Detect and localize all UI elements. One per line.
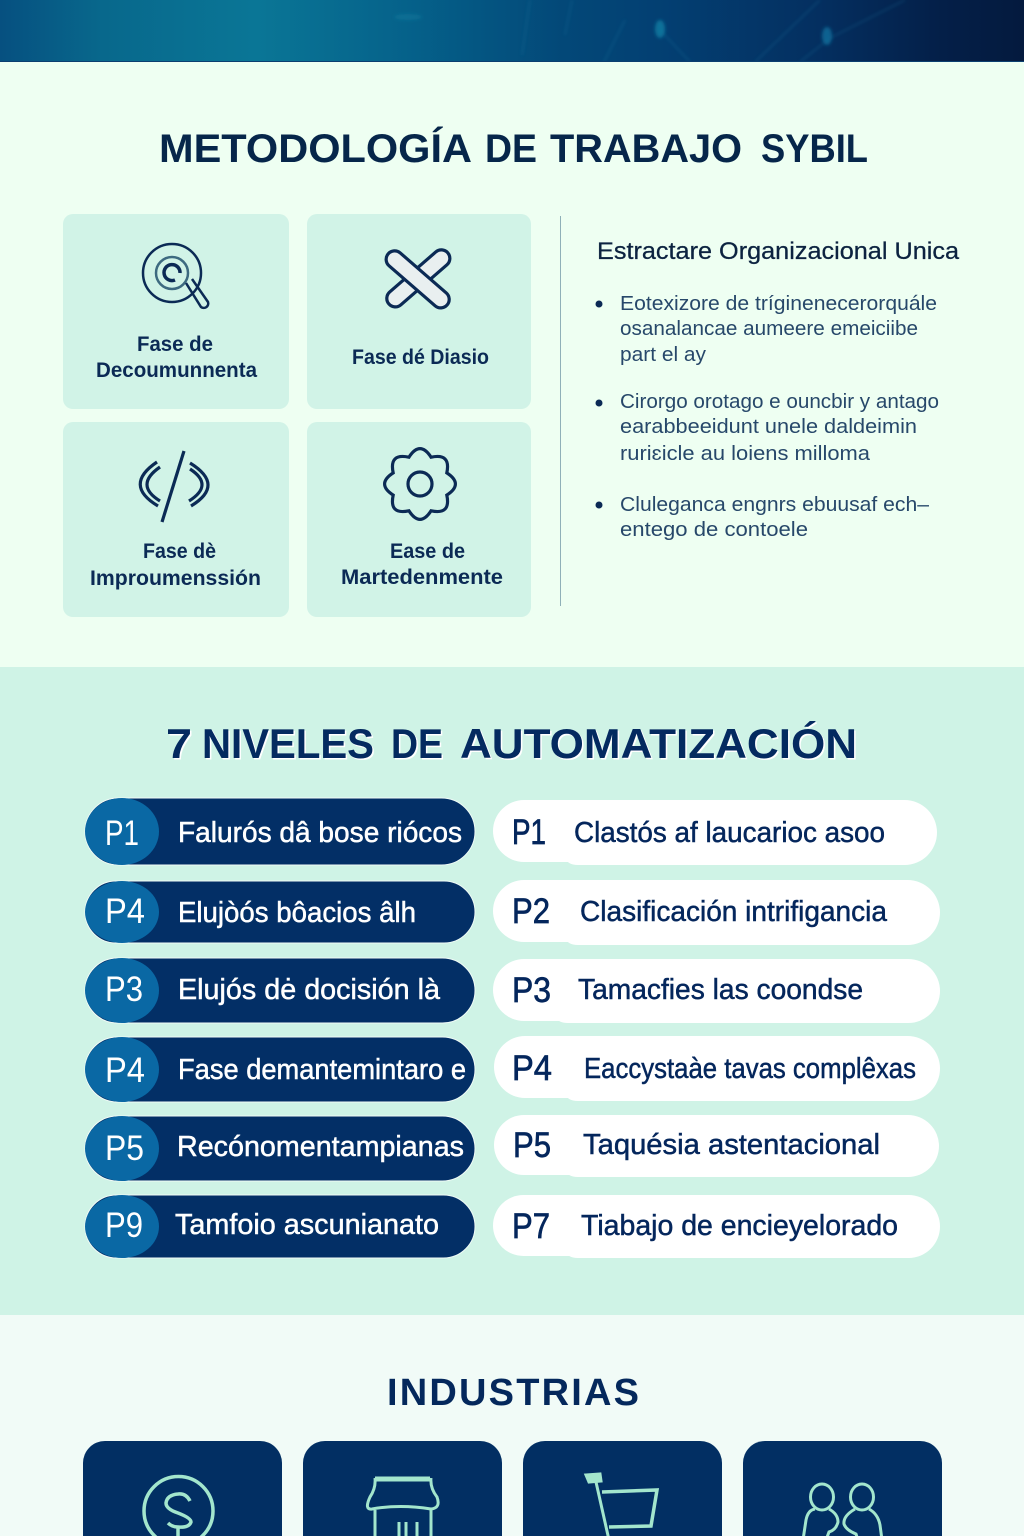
card: fase de diasio xyxy=(307,214,531,409)
level row: P7: Tiabajo de encieyelorado xyxy=(581,1210,898,1242)
label: fase de diasio: Fase dé Diasio xyxy=(352,346,489,369)
title: niveles: DE xyxy=(391,720,443,767)
icon: people xyxy=(803,1484,882,1536)
level row: P9: P9 xyxy=(105,1206,143,1245)
level row: P3 xyxy=(85,958,475,1023)
level row: P4 fase: P4 xyxy=(105,1051,145,1090)
icon: dollar coin xyxy=(144,1476,213,1536)
level row: P4: Elujòós bôacios âlh xyxy=(178,897,416,929)
level row: P5 taquésia: Taquésia astentacional xyxy=(583,1129,880,1161)
level row: P7 xyxy=(493,1195,940,1258)
level row: P7: P7 xyxy=(512,1207,550,1246)
level row: P3 tamacfies xyxy=(493,959,940,1023)
bullet item 2 xyxy=(596,391,939,465)
title: niveles: 7 xyxy=(168,722,194,768)
title: metodología: DE xyxy=(485,127,537,171)
label: fase de improumenssión: Fase dè xyxy=(143,540,216,563)
bullet item 1: Eotexizore de tríginenecerorquále xyxy=(620,293,937,315)
title: metodología: SYBIL xyxy=(761,127,868,171)
title: niveles: NIVELES xyxy=(202,720,374,767)
bullet item 3 xyxy=(596,494,930,541)
level row: P3: Elujós dė docisión là xyxy=(178,974,441,1006)
level row: P5 taquésia: P5 xyxy=(513,1126,551,1165)
bullet item 3: Cluleganca engnrs ebuusaf ech– xyxy=(620,494,930,516)
level row: P4: P4 xyxy=(105,892,145,931)
level row: P2: Clasificación intrifigancia xyxy=(580,896,888,928)
title: niveles: 7 xyxy=(166,720,192,767)
level row: P5: P5 xyxy=(105,1129,144,1168)
level row: P5: Recónomentampianas xyxy=(177,1131,464,1163)
level row: P9 xyxy=(85,1195,475,1258)
level row: P4 eaccystaàe: P4 xyxy=(512,1049,552,1088)
title: metodología: METODOLOGÍA xyxy=(159,126,472,171)
bullet item 2: earabbeeidunt unele daldeimin xyxy=(620,416,917,438)
card: people xyxy=(743,1441,942,1536)
level row: P1: P1 xyxy=(105,814,139,853)
level row: P1 xyxy=(85,798,475,865)
icon: magnifier xyxy=(143,244,208,308)
icon: shopping cart xyxy=(586,1474,657,1536)
level row: P1: Falurós dâ bose riócos xyxy=(178,817,462,849)
bullet item 1: part el ay xyxy=(620,344,706,366)
icon: store xyxy=(367,1478,438,1536)
bullet item 1: osanalancae aumeere emeiciibe xyxy=(620,318,918,340)
title: niveles: NIVELES xyxy=(204,722,376,768)
bullet list xyxy=(596,293,939,541)
white levels column xyxy=(493,800,940,1258)
title: niveles xyxy=(166,719,858,768)
icon: gear xyxy=(385,449,455,519)
title: niveles: AUTOMATIZACIÓN xyxy=(462,720,858,768)
title: industrias: INDUSTRIAS xyxy=(387,1372,639,1414)
section: niveles de automatización xyxy=(0,667,1024,1315)
card: finance xyxy=(83,1441,282,1536)
dark levels column xyxy=(85,798,475,1258)
section: metodología xyxy=(0,62,1024,667)
card: ease de martedenmente xyxy=(307,422,531,617)
title: niveles: AUTOMATIZACIÓN xyxy=(460,719,857,767)
label: fase de decoumunnenta: Fase de xyxy=(137,333,213,356)
card: fase de decoumunnenta xyxy=(63,214,289,409)
heading: estructura organizacional: Estractare Organizacional Unica xyxy=(597,238,960,265)
card: shopping xyxy=(523,1441,722,1536)
level row: P5 taquésia xyxy=(494,1115,939,1177)
card: retail store xyxy=(303,1441,502,1536)
label: fase de improumenssión: Improumenssión xyxy=(90,567,261,590)
label: fase de decoumunnenta: Decoumunnenta xyxy=(96,359,257,382)
card: fase de improumenssión xyxy=(63,422,289,617)
level row: P1 clastós: P1 xyxy=(512,813,546,852)
label: ease de martedenmente: Martedenmente xyxy=(341,566,503,589)
title: metodología: TRABAJO xyxy=(550,127,742,171)
level row: P1 clastós xyxy=(493,800,937,865)
level row: P1 clastós: Clastós af laucarioc asoo xyxy=(574,817,885,849)
bullet item 2: ruriɛicle au loiens milloma xyxy=(620,443,871,465)
level row: P4 fase: Fase demantemintaro e xyxy=(178,1054,466,1086)
level row: P4 xyxy=(85,881,475,943)
level row: P3: P3 xyxy=(105,970,143,1009)
level row: P4 fase xyxy=(85,1037,475,1102)
level row: P3 tamacfies: Tamacfies las coondse xyxy=(578,974,863,1006)
header banner xyxy=(0,0,1024,70)
section: industrias xyxy=(0,1315,1024,1536)
bullet item 2: Cirorgo orotago e ouncbir y antago xyxy=(620,391,939,413)
level row: P2 xyxy=(493,880,940,945)
label: ease de martedenmente: Ease de xyxy=(390,540,465,563)
level row: P3 tamacfies: P3 xyxy=(512,971,551,1010)
level row: P4 eaccystaàe: Eaccystaàe tavas complêxas xyxy=(584,1053,916,1085)
bullet item 1 xyxy=(596,293,937,366)
title: niveles: DE xyxy=(392,722,444,768)
level row: P9: Tamfoio ascunianato xyxy=(175,1209,439,1241)
level row: P5 xyxy=(85,1116,475,1181)
icon: cycle with slash xyxy=(140,451,208,522)
bullet item 3: entego de contoele xyxy=(620,519,808,541)
level row: P4 eaccystaàe xyxy=(494,1036,940,1101)
icon: crossed tools xyxy=(383,246,453,311)
level row: P2: P2 xyxy=(512,892,550,931)
